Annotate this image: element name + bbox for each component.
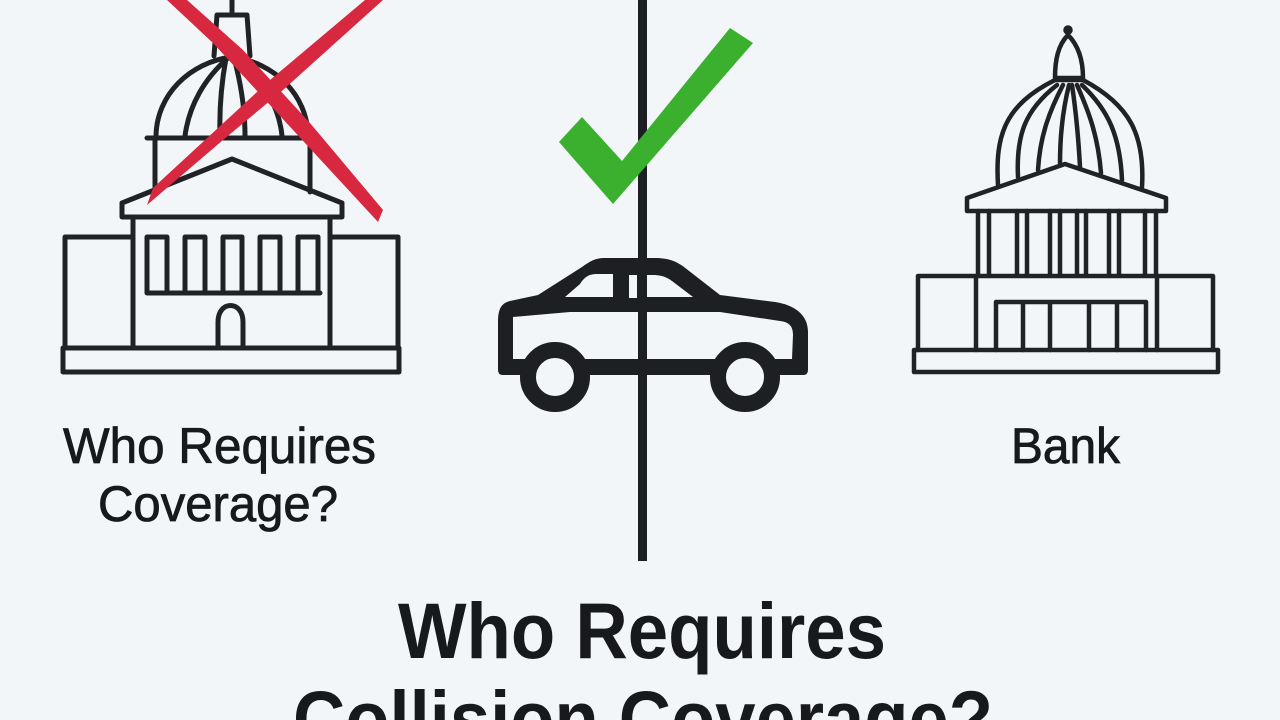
- front and rear wheels: [528, 350, 582, 404]
- icon: car: [498, 258, 808, 413]
- left label: Who Requires: [63, 418, 376, 474]
- right label: Bank: [1011, 418, 1121, 474]
- icon: green check mark: [559, 28, 753, 204]
- vertical divider: [638, 0, 647, 561]
- icon: government building (crossed out): [63, 0, 399, 372]
- title: Who Requires: [398, 586, 886, 675]
- building outline: [63, 0, 399, 372]
- divider over car: [638, 258, 647, 413]
- title: [293, 586, 993, 720]
- left label: Coverage?: [98, 476, 338, 532]
- icon: red cross: [147, 0, 383, 222]
- left label: [63, 418, 376, 532]
- car body: [498, 258, 808, 375]
- icon: bank building: [914, 28, 1218, 372]
